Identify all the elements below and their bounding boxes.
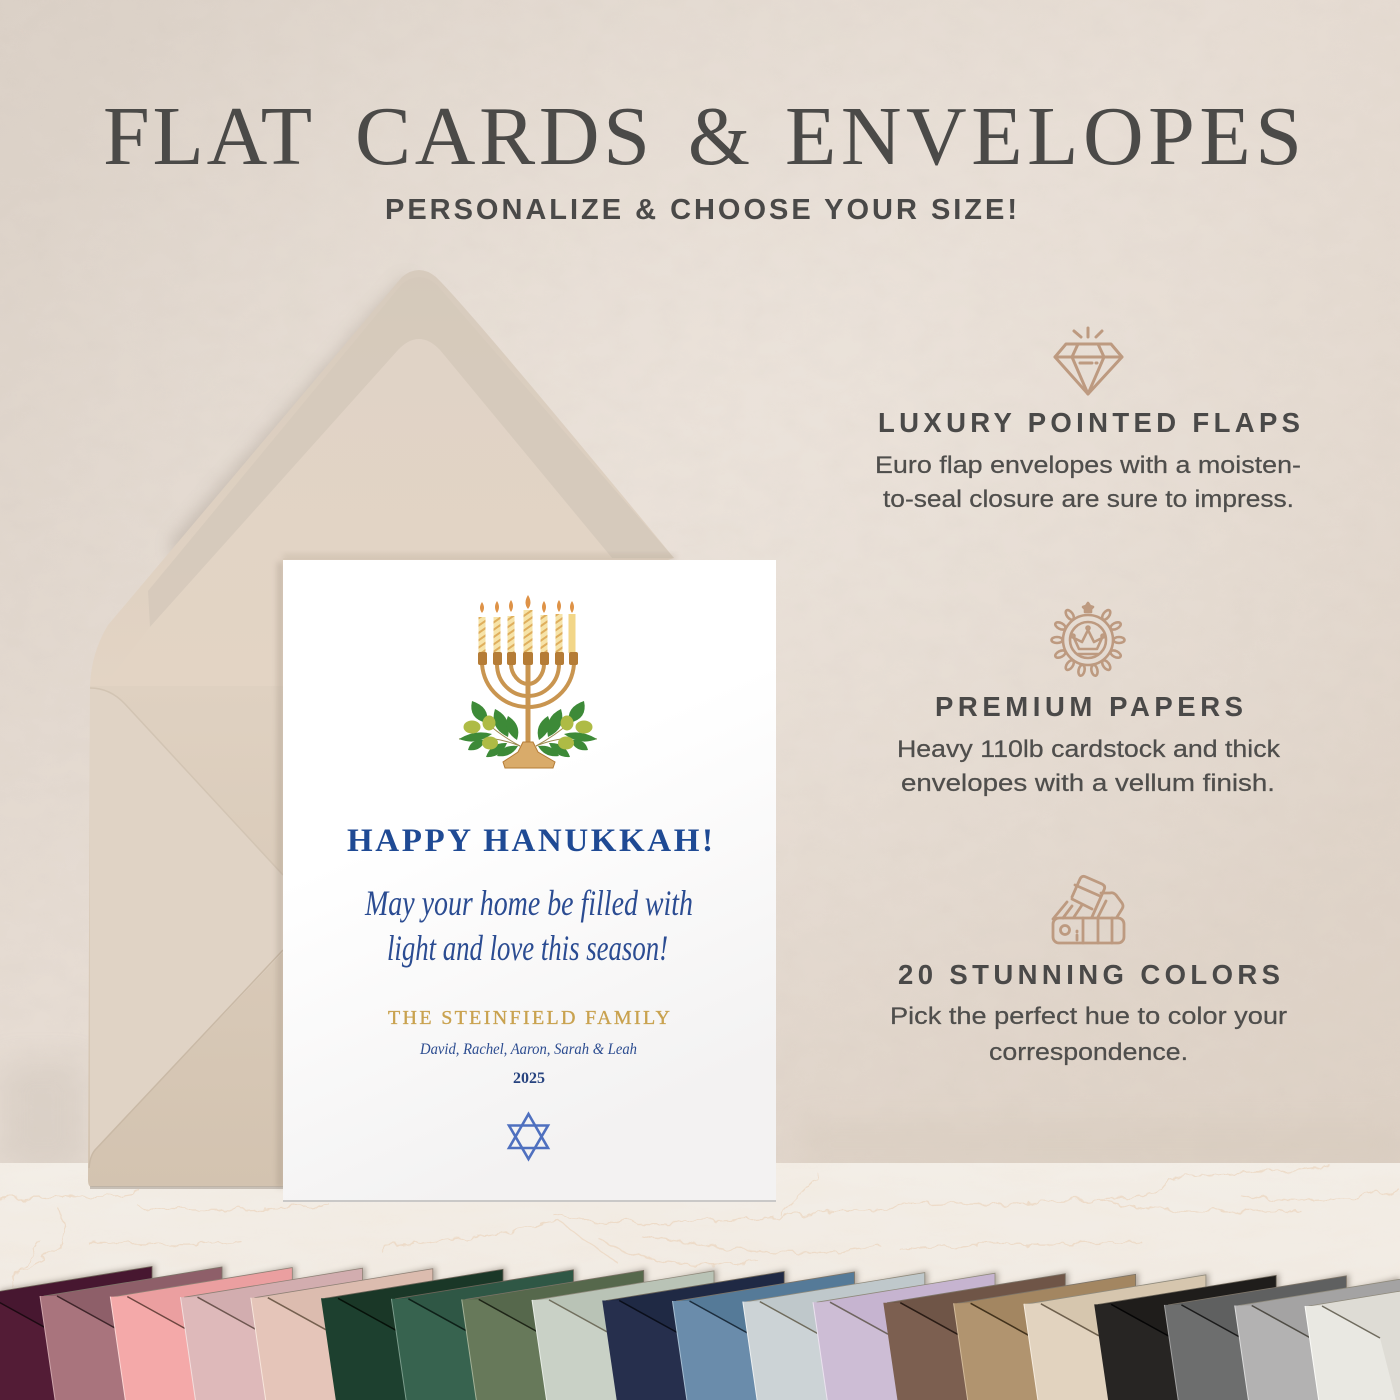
description: Pick the perfect hue to color your bbox=[890, 1003, 1287, 1030]
feature: luxury pointed flaps bbox=[875, 328, 1301, 513]
heading: 20 STUNNING COLORS bbox=[898, 959, 1280, 990]
description bbox=[875, 452, 1301, 513]
swatch: dusty blue bbox=[672, 1272, 854, 1400]
swatch: brown bbox=[883, 1274, 1065, 1400]
family members: David, Rachel, Aaron, Sarah & Leah bbox=[419, 1041, 637, 1058]
family name: THE STEINFIELD FAMILY bbox=[388, 1007, 670, 1029]
base bbox=[503, 742, 555, 768]
heading: LUXURY POINTED FLAPS bbox=[878, 407, 1300, 438]
feature: premium papers bbox=[897, 603, 1281, 797]
swatch: olive bbox=[462, 1270, 644, 1400]
year: 2025 bbox=[513, 1070, 545, 1087]
title: FLAT bbox=[103, 90, 312, 183]
swatch: sage bbox=[532, 1271, 714, 1400]
right olive branch bbox=[536, 701, 597, 757]
envelope: large taupe envelope behind card bbox=[88, 270, 674, 1189]
swatch: teal green bbox=[391, 1270, 573, 1400]
description: Euro flap envelopes with a moisten- bbox=[875, 452, 1301, 479]
feature: twenty stunning colors bbox=[890, 876, 1287, 1066]
icon: menorah with olive branches bbox=[459, 595, 597, 768]
title: ENVELOPES bbox=[785, 90, 1302, 183]
cups bbox=[478, 652, 578, 665]
left side flap bbox=[90, 688, 283, 1160]
swatch: navy bbox=[602, 1272, 784, 1400]
icon: diamond bbox=[1055, 328, 1122, 394]
card script message: light and love this season! bbox=[387, 928, 668, 968]
ground shadow bbox=[90, 1186, 285, 1189]
card script message bbox=[364, 883, 693, 968]
icon: crown badge bbox=[1052, 603, 1124, 676]
bottom flap seams bbox=[89, 950, 283, 1168]
swatch: silver bbox=[1235, 1276, 1400, 1400]
heading: PREMIUM PAPERS bbox=[935, 691, 1243, 722]
swatch: mauve bbox=[40, 1267, 222, 1400]
description bbox=[897, 736, 1281, 797]
description: envelopes with a vellum finish. bbox=[901, 770, 1275, 797]
swatch: tan bbox=[954, 1274, 1136, 1400]
swatch: grey bbox=[1164, 1276, 1346, 1400]
subtitle: PERSONALIZE & CHOOSE YOUR SIZE! bbox=[385, 194, 1017, 226]
title: CARDS bbox=[355, 90, 650, 183]
swatch: burgundy bbox=[0, 1266, 152, 1400]
row shadow on marble bbox=[0, 1264, 1400, 1400]
icon: colour swatch fan bbox=[1053, 876, 1124, 943]
envelope liner bbox=[105, 339, 612, 685]
card script message: May your home be filled with bbox=[364, 883, 693, 923]
swatch: black bbox=[1094, 1275, 1276, 1400]
arms bbox=[482, 655, 574, 745]
swatch: blush bbox=[251, 1269, 433, 1400]
title bbox=[103, 90, 1302, 183]
icon: star of David bbox=[509, 1114, 548, 1159]
description bbox=[890, 1003, 1287, 1066]
description: to-seal closure are sure to impress. bbox=[883, 486, 1294, 513]
swatch: cream bbox=[1024, 1275, 1206, 1400]
title: & bbox=[688, 90, 750, 183]
envelope flap bbox=[90, 270, 674, 690]
description: Heavy 110lb cardstock and thick bbox=[897, 736, 1281, 763]
envelope body bbox=[88, 686, 283, 1187]
description: correspondence. bbox=[989, 1039, 1188, 1066]
translucent flap band bbox=[148, 277, 674, 627]
swatch: hunter green bbox=[321, 1269, 503, 1400]
swatch: pink bbox=[110, 1268, 292, 1400]
swatch: white bbox=[1305, 1277, 1400, 1400]
marble table top bbox=[0, 1163, 1400, 1400]
candles bbox=[478, 595, 576, 653]
swatch: lilac bbox=[813, 1273, 995, 1400]
greeting card bbox=[277, 554, 776, 1202]
swatch: pale blue bbox=[743, 1273, 925, 1400]
flap shadow bbox=[170, 278, 420, 560]
left olive branch bbox=[459, 701, 520, 757]
envelope colour swatch row bbox=[0, 1264, 1400, 1400]
swatch: light pink bbox=[180, 1268, 362, 1400]
card heading: HAPPY HANUKKAH! bbox=[347, 823, 713, 859]
